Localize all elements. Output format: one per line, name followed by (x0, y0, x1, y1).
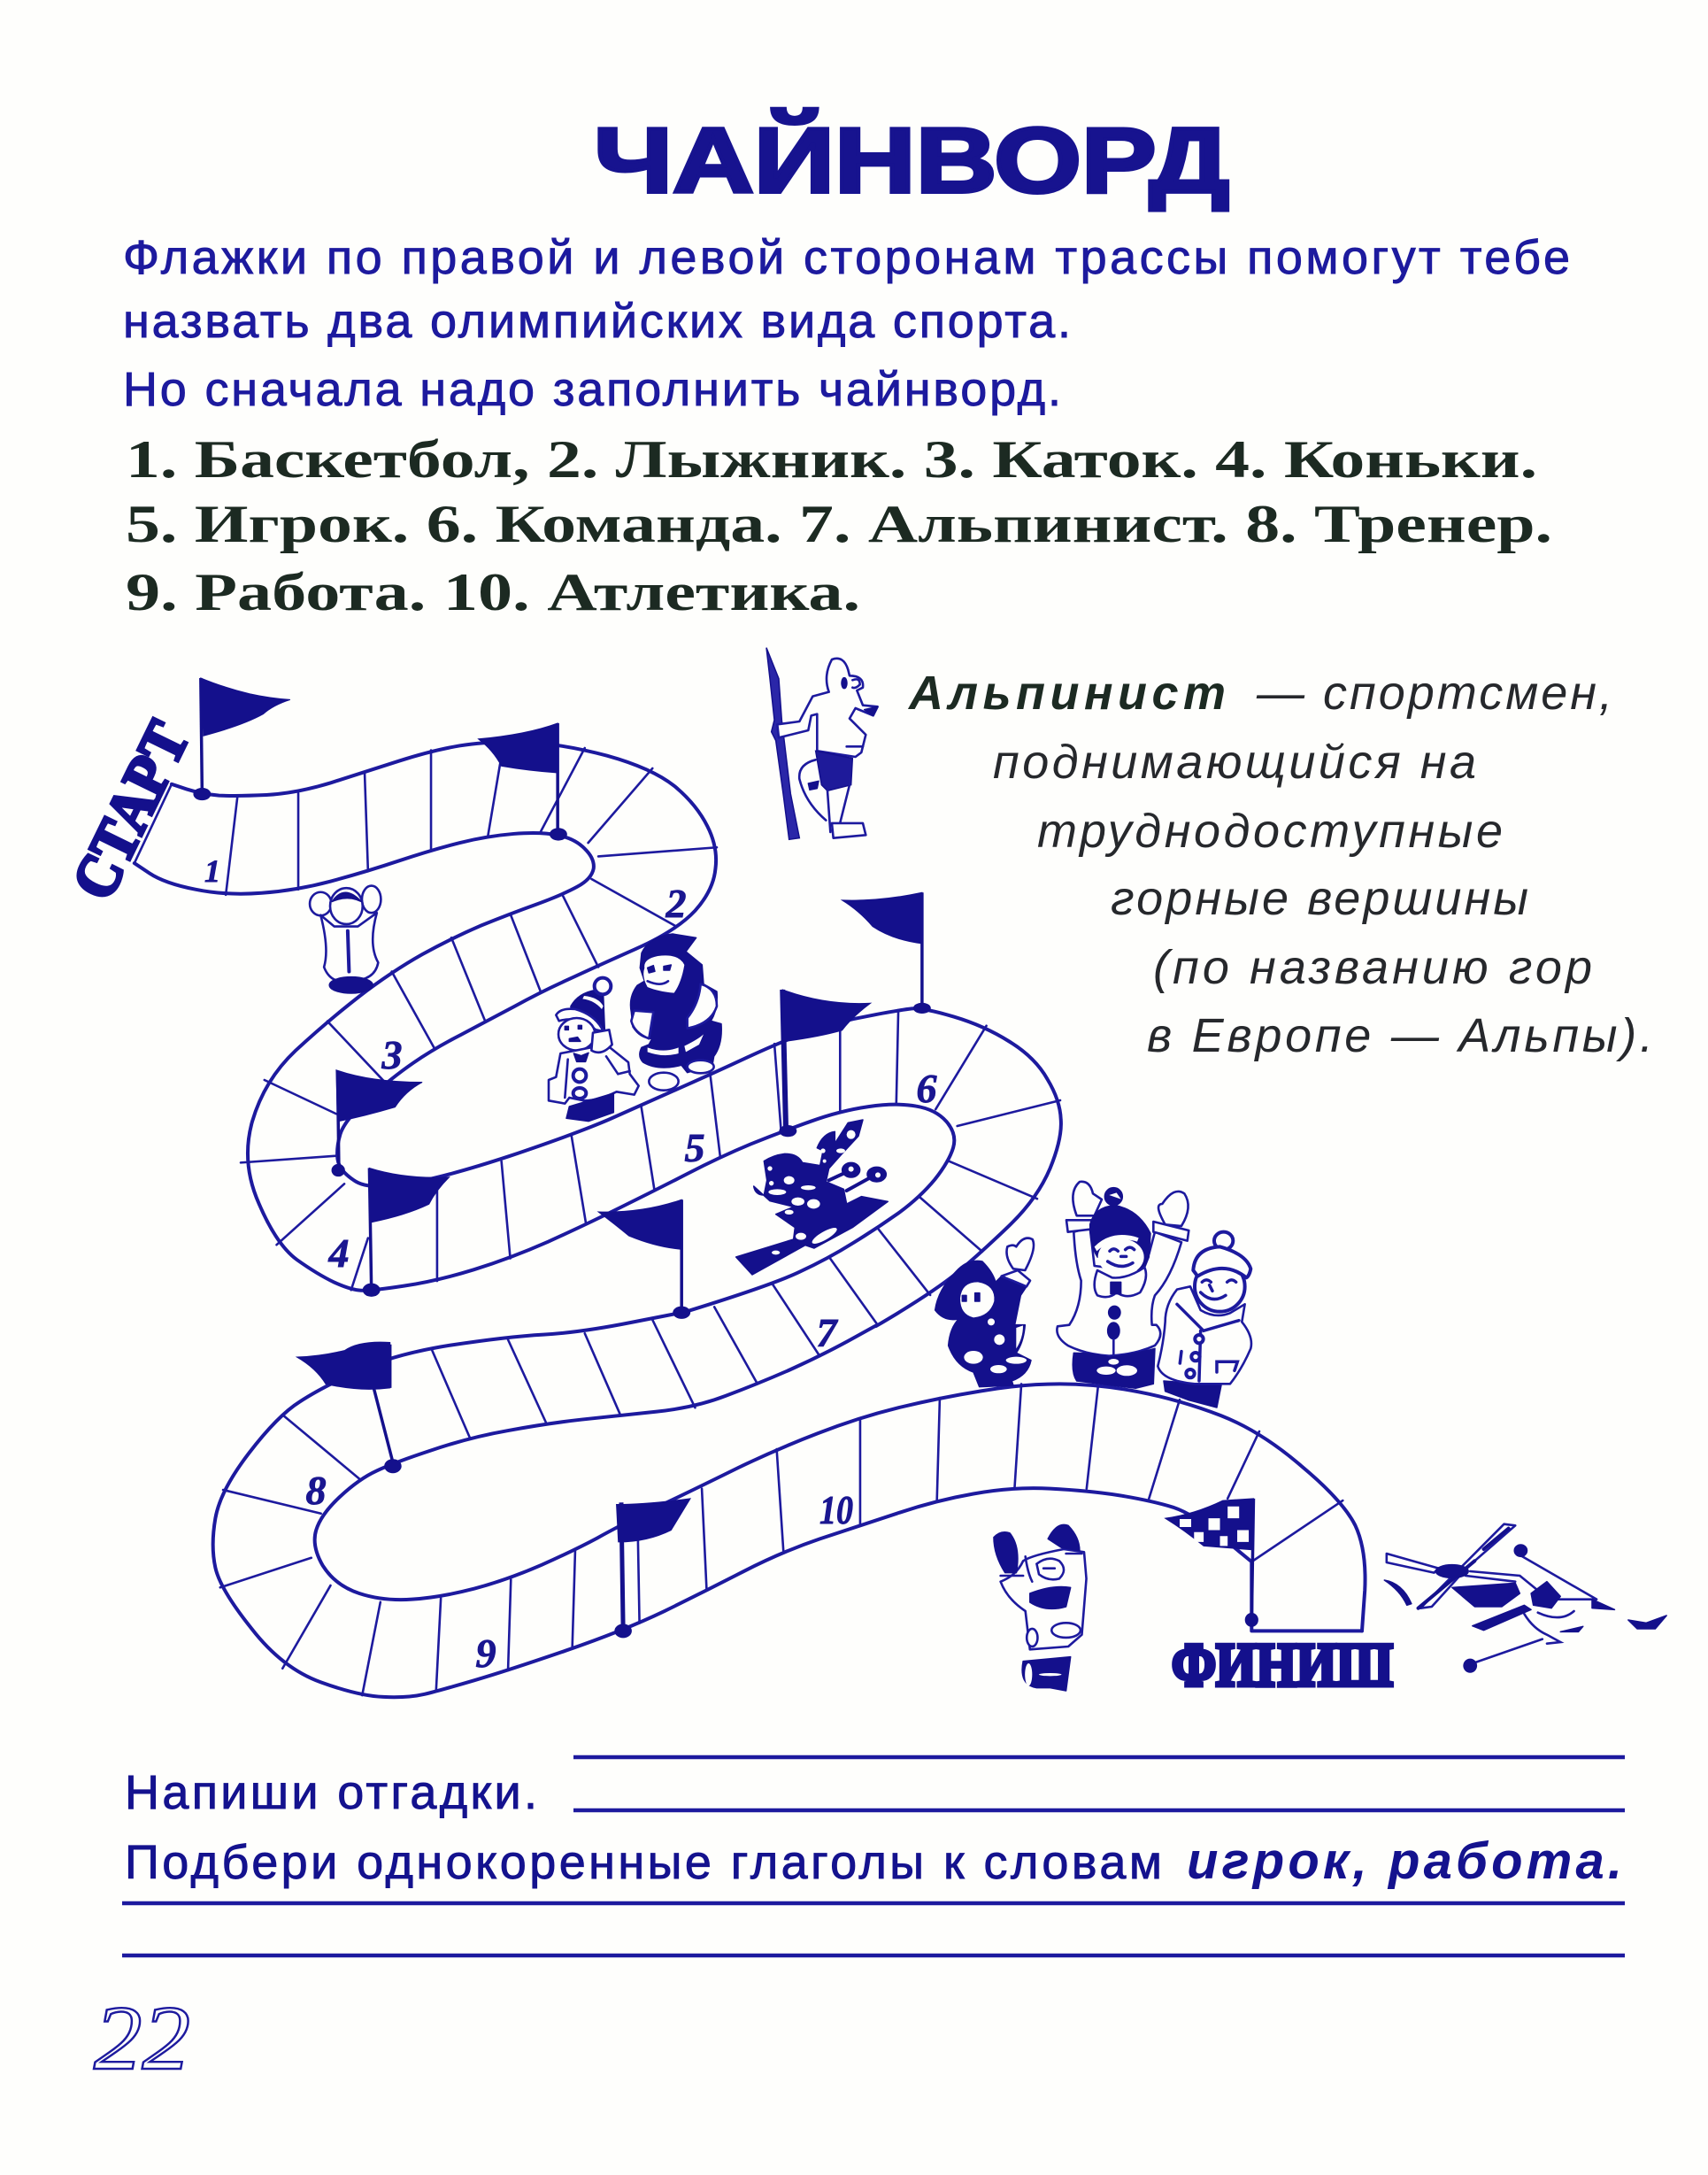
task text: Подбери однокоренные глаголы к словам (125, 1836, 1162, 1889)
cell numbers (204, 853, 936, 1676)
answers list (126, 430, 1552, 621)
cell numbers: 2 (666, 881, 687, 926)
flags lower (297, 1342, 1258, 1638)
flag 8 (297, 1342, 402, 1473)
flag 4 (779, 990, 871, 1137)
instruction text (123, 231, 1570, 416)
cell numbers: 8 (306, 1468, 326, 1513)
instruction text: Флажки по правой и левой сторонам трассы помогут тебе (123, 231, 1570, 284)
icon: kid with dark coat (630, 934, 721, 1091)
icon: skier (736, 1120, 888, 1275)
callout: alpinist definition: в Европе — Альпы). (1147, 1009, 1653, 1062)
cell numbers: 9 (476, 1631, 496, 1676)
icon: girl waving (935, 1238, 1034, 1387)
flag 7 (598, 1199, 690, 1319)
cell numbers: 7 (816, 1310, 839, 1355)
flag 2 (479, 723, 567, 841)
title: ЧАЙНВОРД (594, 109, 1229, 212)
instruction text: назвать два олимпийских вида спорта. (123, 295, 1071, 348)
cell numbers: 3 (381, 1032, 402, 1077)
callout: alpinist definition: поднимающийся на (993, 736, 1476, 789)
callout: alpinist definition (907, 667, 1653, 1062)
page number: 22 (94, 1987, 190, 2089)
callout: alpinist definition: труднодоступные (1037, 805, 1503, 858)
finish flag (1166, 1499, 1258, 1627)
task text (125, 1832, 1622, 1890)
cell numbers: 10 (819, 1487, 853, 1532)
callout: alpinist definition: горные вершины (1111, 872, 1528, 925)
icon: boy arms up (1057, 1182, 1189, 1388)
flag 5 (332, 1070, 422, 1176)
flag 9 (614, 1499, 690, 1638)
icon: kid in bobble hat (549, 978, 639, 1122)
cell numbers: 6 (917, 1066, 936, 1111)
answers list: 9. Работа. 10. Атлетика. (126, 563, 860, 621)
task text: игрок, работа. (1187, 1832, 1622, 1890)
flag 1 (193, 678, 290, 800)
flag 6 (363, 1168, 450, 1297)
answer prompt: Напиши отгадки. (125, 1766, 537, 1819)
finish label: ФИНИШ (1172, 1631, 1393, 1700)
icon: small kid arms up (310, 886, 381, 993)
start label: СТАРТ (59, 712, 203, 910)
icon: kid in fur coat (1158, 1232, 1251, 1408)
icon: mouse climber with spear (766, 648, 878, 839)
cell numbers: 4 (327, 1230, 349, 1276)
callout: alpinist definition: — спортсмен, (1256, 667, 1612, 720)
flags upper (193, 678, 931, 1319)
icon: crashed skier (1384, 1524, 1666, 1672)
answer lines (122, 1757, 1625, 1955)
instruction text: Но сначала надо заполнить чайнворд. (123, 363, 1061, 416)
callout: alpinist definition: Альпинист (907, 667, 1226, 720)
flag 3 (842, 892, 931, 1014)
cell numbers: 1 (204, 853, 220, 889)
cell numbers: 5 (685, 1125, 704, 1170)
race track upper part (135, 742, 1061, 1326)
icon: person seen from behind (994, 1524, 1087, 1691)
race track lower part (213, 1228, 1366, 1697)
callout: alpinist definition: (по названию гор (1153, 941, 1592, 994)
answers list: 5. Игрок. 6. Команда. 7. Альпинист. 8. Тренер. (126, 495, 1552, 553)
answers list: 1. Баскетбол, 2. Лыжник. 3. Каток. 4. Коньки. (126, 430, 1537, 489)
